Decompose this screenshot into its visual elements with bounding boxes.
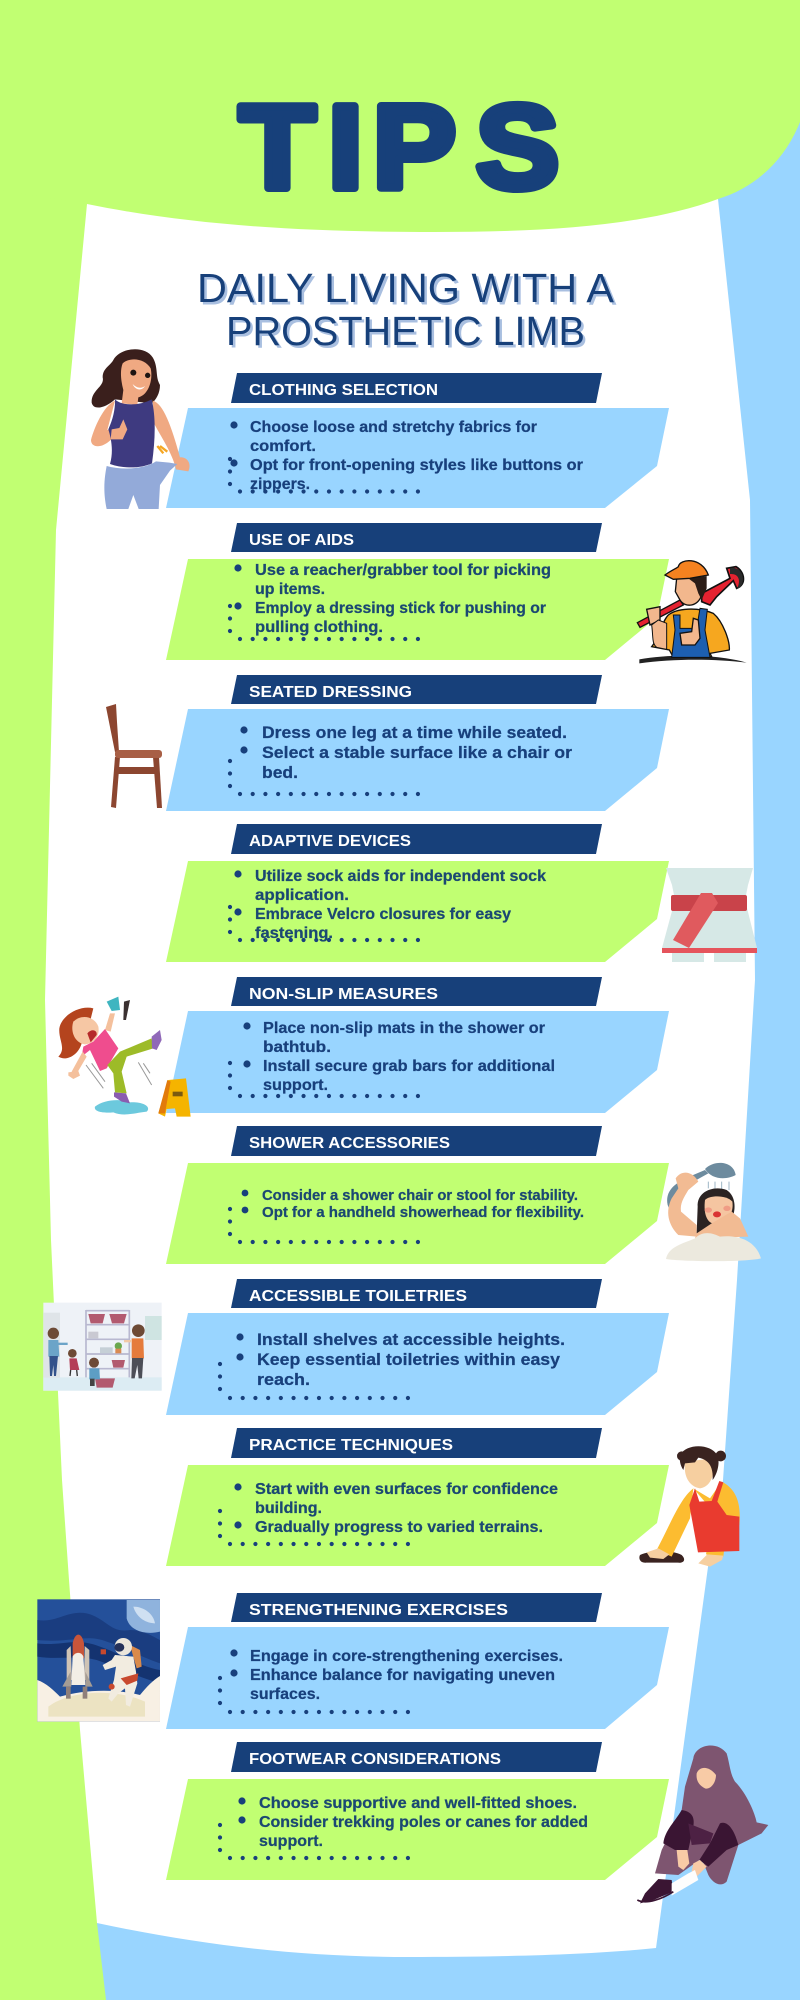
- panel: seated dressing: Dress one leg at a time while seated.: [262, 723, 567, 742]
- panel: practice techniques: PRACTICE TECHNIQUES: [249, 1437, 453, 1454]
- icon: woman with loose waistband: [91, 349, 190, 509]
- panel: adaptive devices: application.: [255, 887, 349, 904]
- panel: footwear considerations: support.: [259, 1833, 323, 1850]
- panel: strengthening exercises: Enhance balance for navigating uneven: [250, 1667, 555, 1684]
- panel: non-slip measures: Place non-slip mats in the shower or: [263, 1020, 545, 1037]
- panel: strengthening exercises: STRENGTHENING EXERCISES: [249, 1602, 508, 1619]
- panel: shower accessories: Consider a shower chair or stool for stability.: [262, 1188, 578, 1204]
- panel: clothing selection: [166, 373, 669, 508]
- panel: footwear considerations: Choose supportive and well-fitted shoes.: [259, 1795, 577, 1812]
- panel: practice techniques: Start with even surfaces for confidence: [255, 1481, 558, 1498]
- panel: clothing selection: comfort.: [250, 438, 316, 455]
- panel: use of aids: Use a reacher/grabber tool for picking: [255, 562, 551, 579]
- icon: girl wiping floor: [639, 1446, 740, 1567]
- subtitle: DAILY LIVING WITH A: [200, 268, 617, 314]
- title: TIPS: [239, 81, 559, 213]
- panel: accessible toiletries: [166, 1279, 669, 1415]
- panel: strengthening exercises: Engage in core-strengthening exercises.: [250, 1648, 563, 1665]
- panel: non-slip measures: [166, 977, 669, 1113]
- panel: accessible toiletries: ACCESSIBLE TOILETRIES: [249, 1288, 467, 1305]
- subtitle: PROSTHETIC LIMB: [226, 308, 585, 354]
- icon: family organizing shelves: [43, 1303, 162, 1391]
- panel: clothing selection: zippers.: [250, 476, 310, 493]
- panel: accessible toiletries: Install shelves at accessible heights.: [257, 1330, 565, 1349]
- panel: shower accessories: SHOWER ACCESSORIES: [249, 1135, 450, 1152]
- panel: seated dressing: SEATED DRESSING: [249, 684, 412, 701]
- panel: seated dressing: [166, 675, 669, 811]
- panel: use of aids: [166, 523, 669, 660]
- panel: shower accessories: Opt for a handheld showerhead for flexibility.: [262, 1205, 584, 1221]
- panel: clothing selection: Opt for front-opening styles like buttons or: [250, 457, 583, 474]
- subtitle: DAILY LIVING WITH A: [197, 265, 615, 311]
- icon: wooden chair: [106, 704, 162, 808]
- panel: non-slip measures: NON-SLIP MEASURES: [249, 986, 438, 1003]
- panel: adaptive devices: ADAPTIVE DEVICES: [249, 833, 411, 850]
- panel: footwear considerations: FOOTWEAR CONSIDERATIONS: [249, 1751, 501, 1768]
- icon: girl slipping: [58, 997, 191, 1117]
- panel: use of aids: Employ a dressing stick for pushing or: [255, 600, 546, 617]
- panel: use of aids: up items.: [255, 581, 325, 598]
- panel: seated dressing: bed.: [262, 763, 298, 782]
- panel: non-slip measures: Install secure grab bars for additional: [263, 1058, 555, 1075]
- icon: person showering: [666, 1163, 761, 1261]
- icon: woman in hijab tying shoes: [637, 1745, 768, 1903]
- panel: shower accessories: [166, 1126, 669, 1264]
- subtitle: [197, 265, 617, 356]
- panel: adaptive devices: [166, 824, 669, 962]
- panel: practice techniques: Gradually progress to varied terrains.: [255, 1519, 543, 1536]
- panel: footwear considerations: [166, 1742, 669, 1880]
- panel: use of aids: USE OF AIDS: [249, 532, 354, 549]
- panel: non-slip measures: bathtub.: [263, 1039, 331, 1056]
- panel: accessible toiletries: reach.: [257, 1370, 310, 1389]
- panel: adaptive devices: Embrace Velcro closures for easy: [255, 906, 511, 923]
- panel: clothing selection: Choose loose and stretchy fabrics for: [250, 419, 537, 436]
- background: green top blob: [0, 0, 800, 232]
- panel: accessible toiletries: Keep essential toiletries within easy: [257, 1350, 561, 1369]
- icon: plumber with wrench: [637, 561, 747, 663]
- panel: practice techniques: building.: [255, 1500, 322, 1517]
- panel: adaptive devices: fastening.: [255, 925, 333, 942]
- panel: footwear considerations: Consider trekking poles or canes for added: [259, 1814, 588, 1831]
- background: white sheet: [45, 199, 755, 1957]
- subtitle: PROSTHETIC LIMB: [228, 310, 588, 356]
- panel: practice techniques: [166, 1428, 669, 1566]
- panel: strengthening exercises: [166, 1593, 669, 1729]
- panel: adaptive devices: Utilize sock aids for independent sock: [255, 868, 546, 885]
- panel: strengthening exercises: surfaces.: [250, 1686, 320, 1703]
- icon: dress with red belt: [662, 868, 757, 962]
- panel: non-slip measures: support.: [263, 1077, 328, 1094]
- icon: astronaut and space shuttle: [37, 1599, 160, 1722]
- panel: clothing selection: CLOTHING SELECTION: [249, 382, 438, 399]
- panel: seated dressing: Select a stable surface like a chair or: [262, 743, 572, 762]
- panel: use of aids: pulling clothing.: [255, 619, 383, 636]
